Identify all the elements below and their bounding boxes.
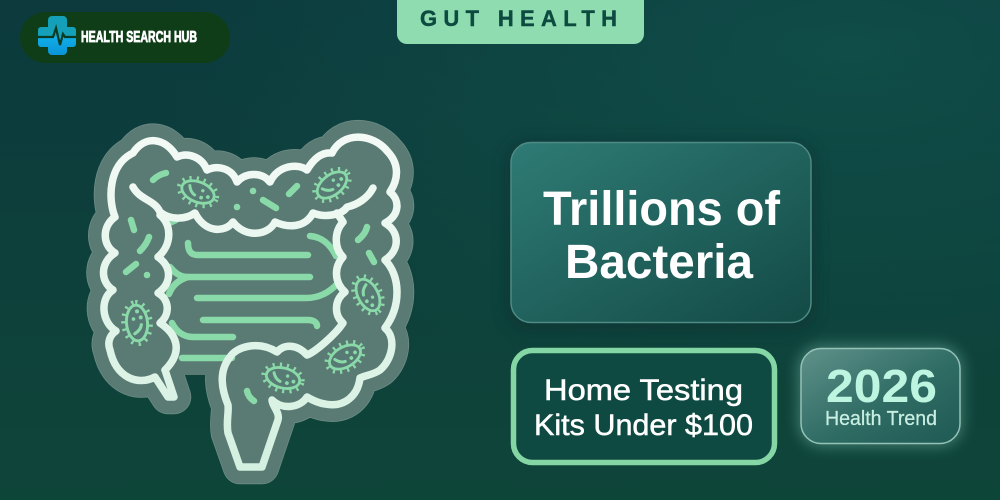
illustration: large intestine with bacteria — [103, 137, 397, 467]
card: Home Testing Kits: Kits Under $100 — [534, 409, 753, 442]
logo: Health Search Hub — [20, 12, 230, 63]
badge: 2026 Health Trend — [798, 345, 963, 447]
card: Trillions of Bacteria: Trillions of — [543, 183, 781, 236]
card: Home Testing Kits — [514, 350, 774, 462]
small intestine loops — [167, 220, 338, 358]
badge: 2026 Health Trend: Health Trend — [825, 408, 937, 430]
badge: 2026 Health Trend: 2026 — [826, 360, 937, 412]
translucent silhouette — [103, 137, 397, 467]
card: Trillions of Bacteria: Bacteria — [565, 236, 753, 289]
card: Home Testing Kits: Home Testing — [544, 374, 743, 407]
colon outline — [103, 137, 397, 467]
card: Trillions of Bacteria — [505, 140, 817, 332]
tag: Gut Health — [397, 0, 644, 44]
tag: Gut Health: GUT HEALTH — [420, 6, 617, 31]
bacteria — [122, 162, 389, 395]
rods and dots — [126, 173, 374, 401]
logo wordmark: HEALTH SEARCH HUB — [81, 29, 197, 46]
icon: medical cross with pulse — [38, 16, 76, 55]
